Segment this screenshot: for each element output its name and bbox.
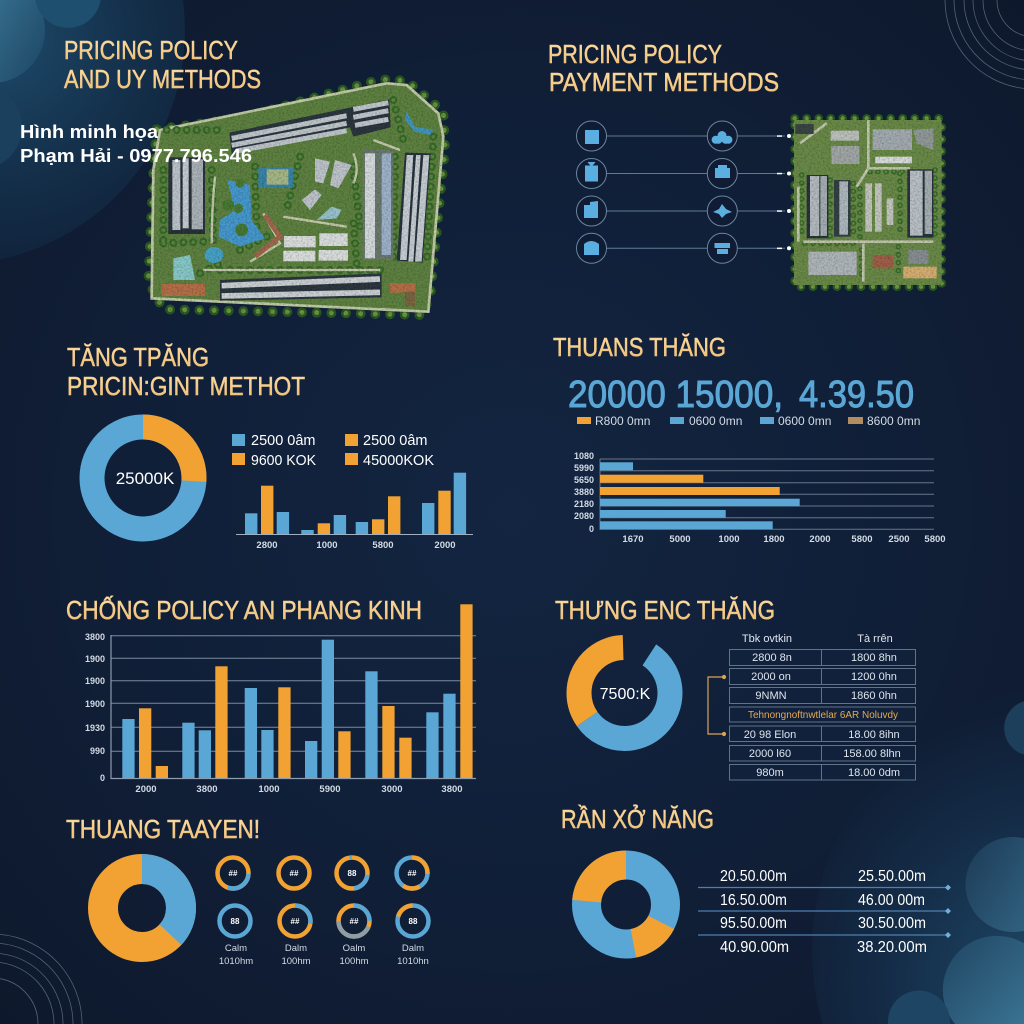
legend: pricing method: 2500 0âm	[251, 433, 316, 449]
horizontal bar chart: 2000	[809, 534, 831, 545]
horizontal bar chart: 5650	[574, 475, 594, 485]
donut chart: 25000K	[92, 427, 194, 529]
pricing table: 1860 0hn	[851, 690, 897, 702]
ring captions	[219, 943, 429, 967]
horizontal bar chart: 2180	[574, 499, 594, 509]
horizontal bar chart	[574, 451, 946, 545]
horizontal bar chart: 1000	[718, 534, 740, 545]
grouped bar chart: small: 2800	[256, 540, 278, 551]
ring captions: 1010hm	[219, 956, 253, 967]
small pond	[205, 247, 223, 263]
aerial site plan: left	[148, 79, 445, 315]
legend: figures: R800 0mn	[595, 414, 650, 428]
grouped bar chart: large: 1900	[85, 654, 105, 664]
grouped bar chart: large: 1930	[85, 723, 105, 733]
legend: figures: 8600 0mn	[867, 414, 920, 428]
connector end dots	[777, 134, 791, 250]
donut chart: large orange	[103, 869, 181, 947]
horizontal bar chart: 1080	[574, 451, 594, 461]
watermark: Hình minh họa	[20, 121, 159, 142]
pricing table: Tbk ovtkin	[742, 633, 792, 645]
grouped bar chart: small	[236, 473, 473, 551]
icon: gift	[586, 162, 598, 181]
pricing table: 1200 0hn	[851, 671, 897, 683]
grouped bar chart: large: 1900	[85, 699, 105, 709]
icon circles	[576, 121, 737, 263]
top residential strip	[229, 99, 391, 154]
interior tree clumps	[802, 170, 935, 278]
value list: 46.00 00m	[858, 892, 925, 909]
middle residential rows	[283, 233, 348, 261]
horizontal bar chart: 5800	[924, 534, 946, 545]
main lagoon	[218, 180, 265, 247]
horizontal bar chart: 2080	[574, 511, 594, 521]
donut chart: 7500K: 7500:K	[600, 686, 651, 703]
value list: 95.50.00m	[720, 915, 787, 932]
heading: pricing policy payment methods: PRICING POLICY	[548, 41, 722, 69]
big figures: 4.39.50	[799, 374, 914, 416]
horizontal bar chart: 1670	[622, 534, 644, 545]
pricing table: 18.00 0dm	[848, 767, 900, 779]
pricing table: 2000 l60	[749, 748, 791, 760]
grouped bar chart: large: 5900	[319, 784, 341, 795]
grouped bar chart: large: 3800	[441, 784, 463, 795]
ring 5: 88	[231, 917, 240, 926]
pricing table: 980m	[756, 767, 784, 779]
ring captions: Calm	[225, 943, 247, 954]
site base	[152, 83, 443, 312]
ring 8: 88	[409, 917, 418, 926]
heading: thung enc thang: THƯNG ENC THĂNG	[555, 596, 775, 625]
grouped bar chart: large: 0	[100, 773, 105, 783]
bottom residential row	[220, 273, 382, 301]
red roof clubhouses	[162, 283, 415, 306]
horizontal bar chart: 3880	[574, 487, 594, 497]
grouped bar chart: large: 1000	[258, 784, 280, 795]
icon: sofa	[584, 241, 599, 255]
donut chart: 25000K: 25000K	[116, 469, 175, 488]
ring captions: 100hm	[339, 956, 369, 967]
grouped bar chart: small: 5800	[372, 540, 394, 551]
icon: clover	[712, 131, 732, 144]
ring 4	[396, 858, 428, 888]
watermark: Phạm Hải - 0977.796.546	[20, 145, 252, 166]
grouped bar chart: large: 2000	[135, 784, 157, 795]
ring 7	[338, 906, 370, 936]
lagoon islands	[223, 179, 248, 236]
ring 7: ##	[350, 917, 359, 926]
heading: pricing policy payment methods	[548, 41, 779, 97]
pricing table: Tehnongnoftnwtlelar 6AR Noluvdy	[748, 710, 898, 721]
icon: couch	[715, 165, 730, 178]
internal roads	[798, 120, 933, 282]
grouped bar chart: large: 3000	[381, 784, 403, 795]
ring 6: ##	[291, 917, 300, 926]
ring 2: ##	[290, 869, 299, 878]
ring captions: Dalm	[285, 943, 307, 954]
ring 4: ##	[408, 869, 417, 878]
ring captions: Dalm	[402, 943, 424, 954]
payment method connector diagram	[576, 121, 791, 263]
ring 1: ##	[229, 869, 238, 878]
pricing table: 9NMN	[755, 690, 787, 702]
pricing table: 20 98 Elon	[744, 729, 796, 741]
value list	[698, 868, 951, 956]
value list: 16.50.00m	[720, 892, 787, 909]
icon: document	[585, 130, 599, 144]
heading: tang tpang pricing method: TĂNG TPĂNG	[67, 343, 209, 372]
horizontal bar chart: 5990	[574, 463, 594, 473]
legend: figures	[577, 414, 920, 428]
icon: star shape	[713, 204, 732, 218]
left residential block	[168, 157, 205, 234]
grouped bar chart: small: 2000	[434, 540, 456, 551]
legend: pricing method: 9600 KOK	[251, 452, 316, 469]
interior tree clumps	[163, 100, 433, 273]
ring 3	[336, 858, 368, 888]
value list: 40.90.00m	[720, 939, 789, 956]
pricing table: 158.00 8lhn	[843, 748, 901, 760]
eastern residential columns	[363, 150, 431, 263]
grouped bar chart: large: 1900	[85, 676, 105, 686]
ring 1	[218, 858, 248, 888]
south buildings	[808, 250, 937, 278]
pricing table	[730, 633, 916, 780]
horizontal bar chart: 0	[589, 524, 594, 534]
heading: tang tpang pricing method	[67, 343, 305, 401]
heading: tang tpang pricing method: PRICIN:GINT METHOT	[67, 373, 305, 401]
upper pool	[258, 167, 293, 188]
pricing table: 2000 on	[751, 671, 791, 683]
grouped bar chart: large	[85, 604, 476, 795]
heading: pricing policy and uy methods: AND UY METHODS	[64, 66, 261, 94]
ring 8	[398, 906, 428, 936]
ring captions: 100hm	[281, 956, 311, 967]
family pool	[173, 255, 195, 280]
heading: pricing policy and uy methods: PRICING POLICY	[64, 37, 238, 65]
grouped bar chart: large: 3800	[196, 784, 218, 795]
value list: 38.20.00m	[857, 939, 927, 956]
central townhouses	[865, 183, 893, 232]
big figures: 20000 15000,	[568, 374, 783, 416]
ring captions: Oalm	[343, 943, 365, 954]
top right pond	[405, 112, 433, 135]
horizontal bar chart: 5800	[851, 534, 873, 545]
central towers	[302, 158, 352, 220]
grouped bar chart: large: 990	[90, 746, 105, 756]
legend: pricing method: 45000KOK	[363, 452, 434, 469]
light paths	[203, 140, 400, 270]
north buildings	[795, 124, 933, 164]
legend: figures: 0600 0mn	[689, 414, 742, 428]
pricing table: 1800 8hn	[851, 652, 897, 664]
heading: ran xo nang: RẦN XỞ NĂNG	[561, 804, 714, 834]
ring 3: 88	[348, 869, 357, 878]
aerial site plan: right	[794, 118, 942, 287]
donut chart: 7500K	[579, 648, 670, 738]
legend: figures: 0600 0mn	[778, 414, 831, 428]
icon: box	[584, 201, 598, 218]
pricing table: 18.00 8ihn	[848, 729, 900, 741]
small ring charts	[218, 858, 429, 967]
grouped bar chart: large: 3800	[85, 632, 105, 642]
pricing table: Tà rrên	[857, 633, 893, 645]
icon: stacked trays	[714, 243, 730, 254]
east block	[907, 169, 933, 238]
bracket connector	[708, 676, 726, 736]
west long blocks	[807, 175, 851, 238]
heading: pricing policy and uy methods	[64, 37, 261, 94]
tree border	[148, 79, 445, 315]
horizontal bar chart: 5000	[669, 534, 691, 545]
grouped bar chart: small: 1000	[316, 540, 338, 551]
ring 6	[280, 906, 310, 936]
ring 2	[278, 858, 310, 888]
value list: 20.50.00m	[720, 868, 787, 885]
value list: 30.50.00m	[858, 915, 926, 932]
donut chart: four segments	[586, 865, 666, 944]
watermark	[20, 121, 252, 166]
legend: pricing method: 2500 0âm	[363, 433, 428, 449]
ring 5	[220, 906, 250, 936]
legend: pricing method	[232, 433, 434, 469]
heading: thuang taayen: THUANG TAAYEN!	[66, 816, 260, 844]
horizontal bar chart: 1800	[763, 534, 785, 545]
heading: chong policy an phang kinh: CHỐNG POLICY AN PHANG KINH	[66, 595, 422, 625]
tree border	[795, 118, 942, 287]
heading: pricing policy payment methods: PAYMENT METHODS	[549, 69, 779, 97]
connector lines	[607, 136, 785, 248]
heading: thuans thang: THUANS THĂNG	[553, 333, 726, 362]
value list: 25.50.00m	[858, 868, 926, 885]
ring captions: 1010hn	[397, 956, 429, 967]
site base	[794, 120, 942, 285]
pricing table: 2800 8n	[752, 652, 792, 664]
horizontal bar chart: 2500	[888, 534, 910, 545]
big figures	[568, 374, 914, 416]
